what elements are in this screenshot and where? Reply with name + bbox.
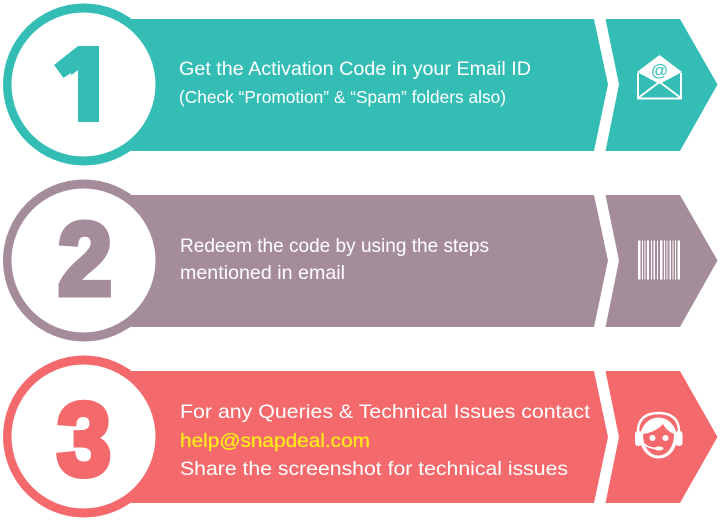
text: step 3 line 3: Share the screenshot for technical issues xyxy=(180,458,568,480)
arrow bar: step 1 xyxy=(125,19,608,151)
icon: open envelope: @ xyxy=(651,61,668,80)
panel: step 1 xyxy=(3,4,718,166)
number circle: step 2 xyxy=(3,180,165,342)
number: 1: 1 xyxy=(53,24,113,145)
text: step 2 line 2: mentioned in email xyxy=(180,262,345,284)
number circle: step 1 xyxy=(3,4,165,166)
arrow head: step 1 xyxy=(606,19,718,151)
icon: support agent headset xyxy=(635,413,682,458)
icon: open envelope xyxy=(637,55,682,98)
number: 2: 2 xyxy=(58,202,112,316)
arrow head: step 2 xyxy=(606,195,718,327)
number: 3: 3 xyxy=(57,382,111,497)
text: step 2 line 1: Redeem the code by using the steps xyxy=(180,235,489,257)
arrow head: step 3 xyxy=(606,371,718,503)
text: step 3 line 1: For any Queries & Technical Issues contact xyxy=(180,401,591,423)
panel: step 3 xyxy=(3,356,718,518)
text: step 1 heading: Get the Activation Code in your Email ID xyxy=(179,58,531,80)
text: email address: help@snapdeal.com xyxy=(180,430,370,452)
panel: step 2 xyxy=(3,180,718,342)
arrow bar: step 3 xyxy=(125,371,608,503)
number circle: step 3 xyxy=(3,356,165,518)
arrow bar: step 2 xyxy=(125,195,608,327)
icon: barcode xyxy=(638,240,680,280)
text: step 1 note: (Check “Promotion” & “Spam” folders also) xyxy=(179,87,506,107)
